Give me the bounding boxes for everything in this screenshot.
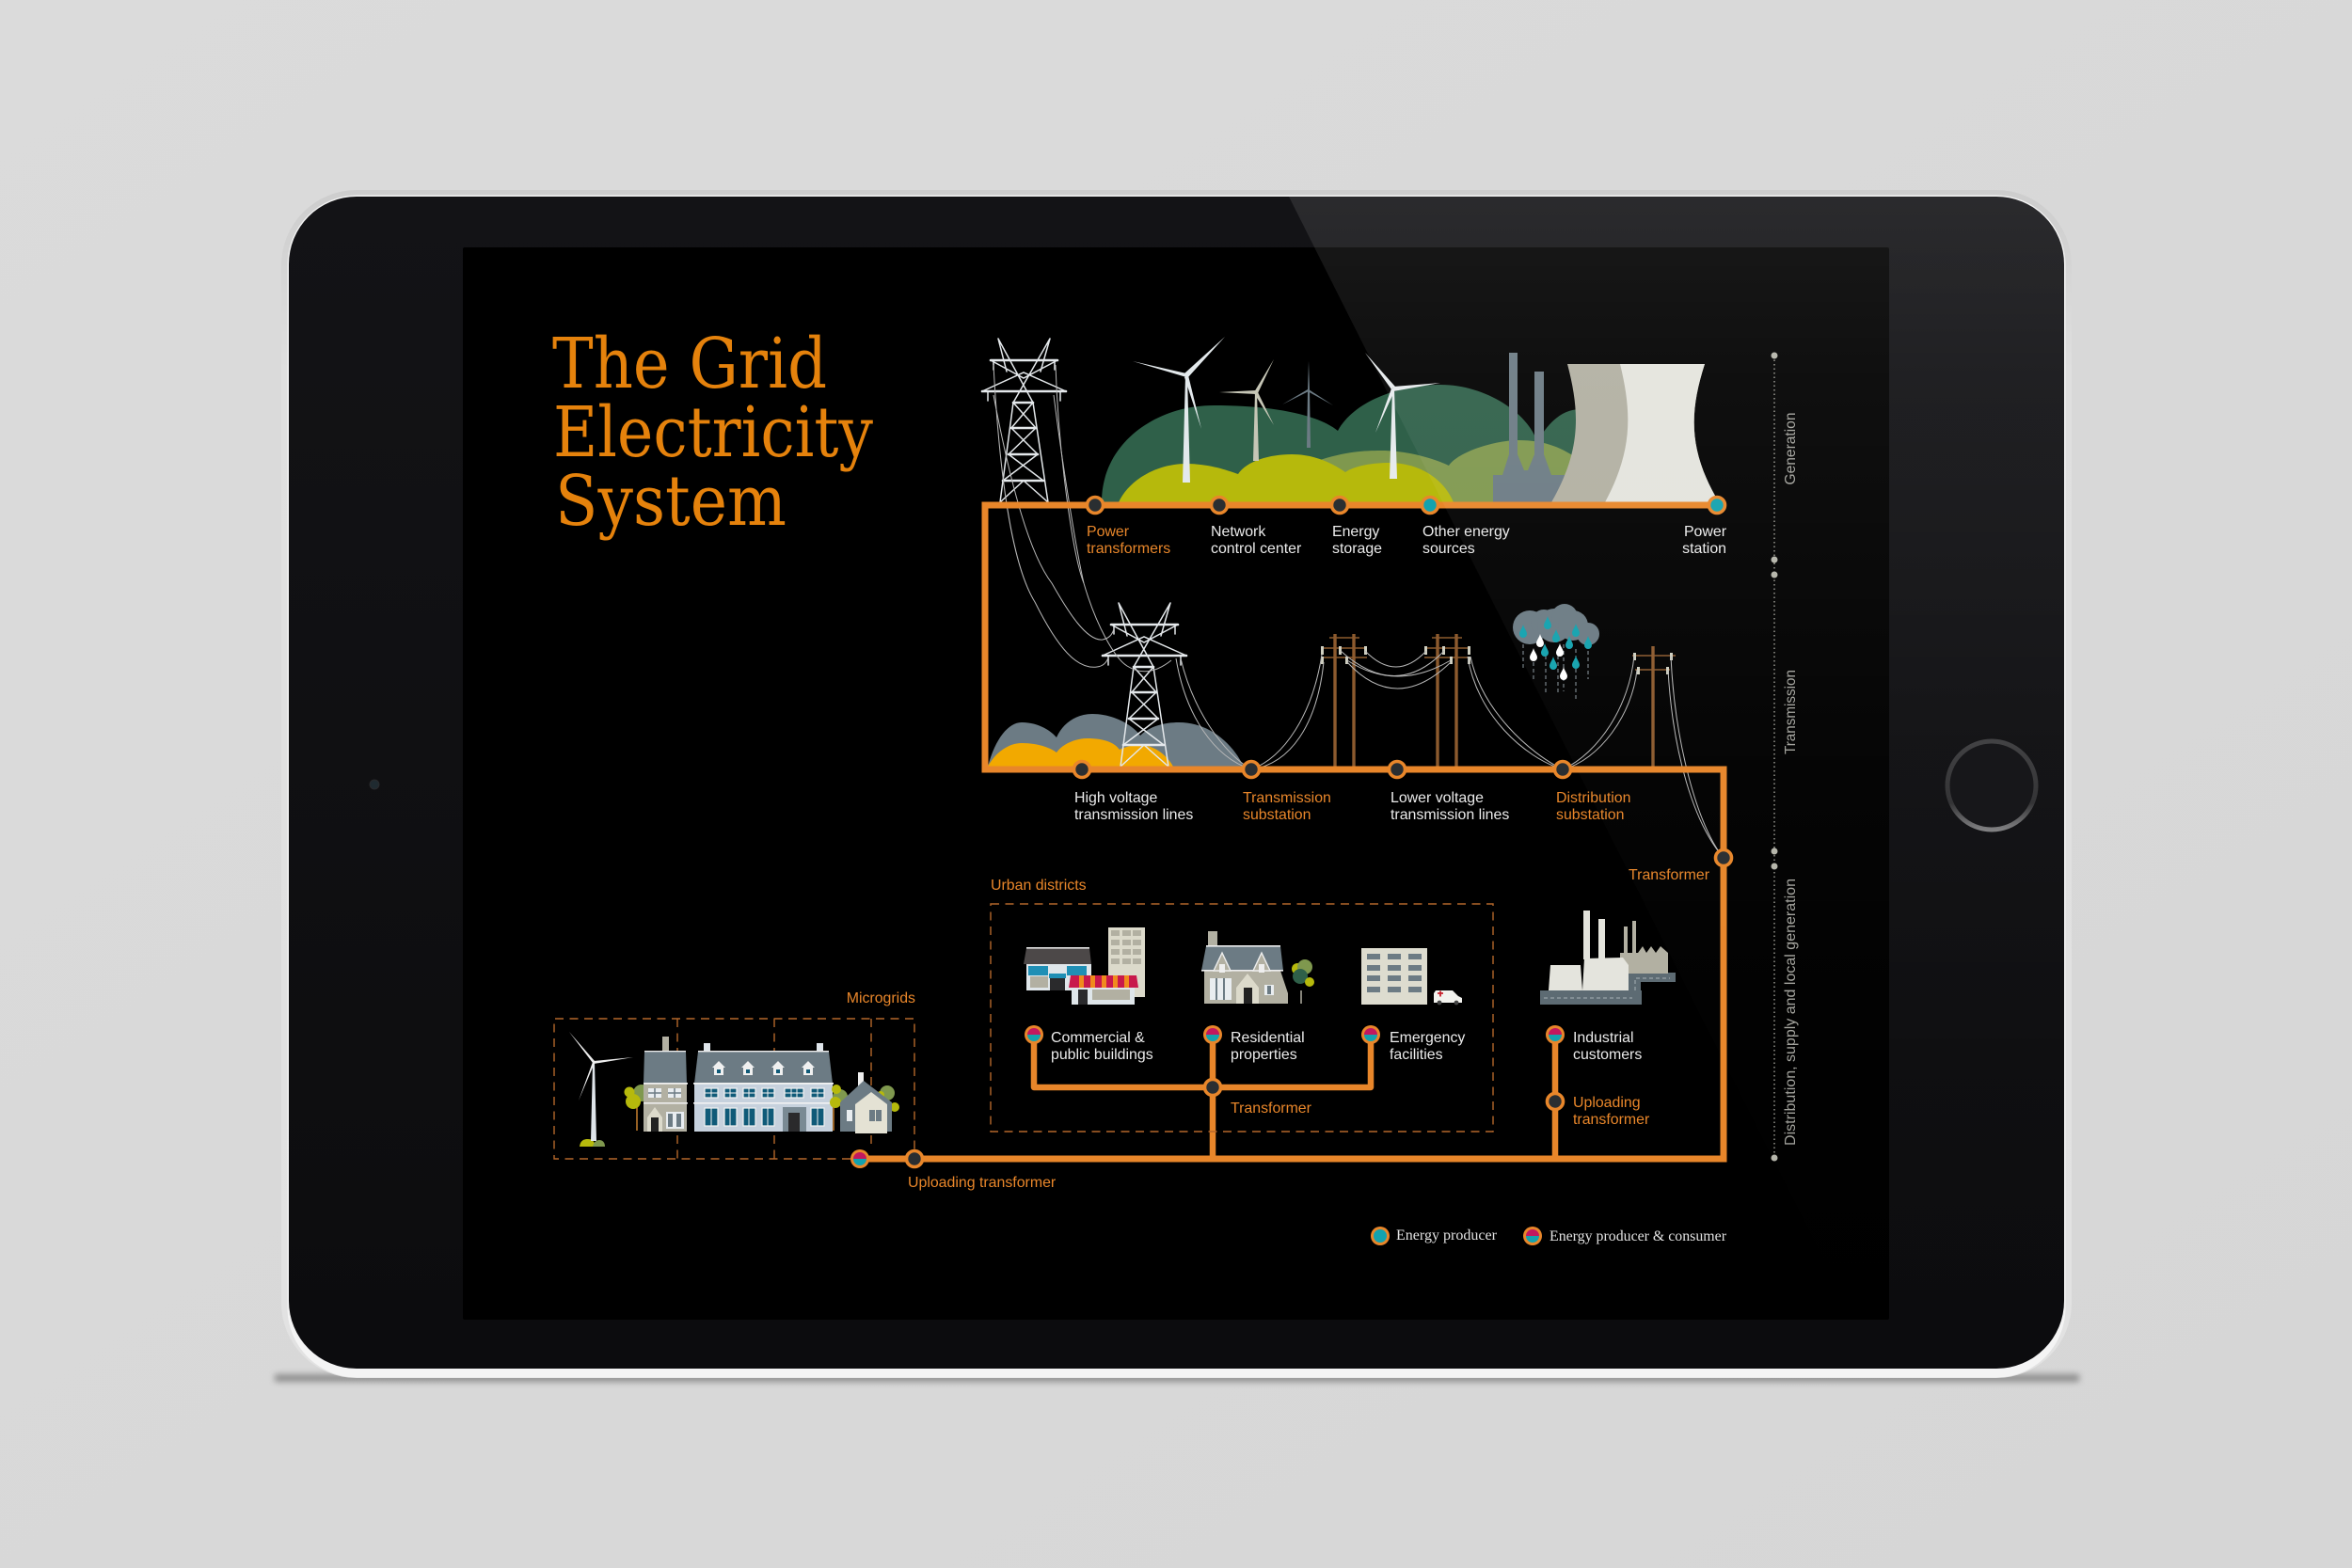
panel: industrial customers bbox=[1540, 911, 1676, 1128]
uploading transformer label: Uploading transformer bbox=[908, 1175, 1057, 1191]
wind turbine 4 bbox=[1365, 353, 1440, 479]
screen glare bbox=[1289, 197, 2064, 638]
urban labels: facilities bbox=[1390, 1047, 1443, 1063]
white drops bbox=[1530, 634, 1567, 680]
urban nodes bbox=[1025, 1025, 1380, 1095]
microgrid nodes bbox=[850, 1149, 922, 1168]
transmission labels bbox=[1074, 790, 1710, 883]
icon: commercial buildings bbox=[1024, 927, 1145, 1005]
transmission labels: transmission lines bbox=[1391, 807, 1509, 823]
panel: microgrids bbox=[554, 990, 1057, 1191]
icon: factory bbox=[1540, 911, 1676, 1005]
transmission labels: High voltage bbox=[1074, 790, 1157, 806]
axis label: distribution: Distribution, supply and local generation bbox=[1783, 879, 1799, 1146]
yellow hills bbox=[988, 738, 1173, 767]
transmission labels: Transmission bbox=[1243, 790, 1331, 806]
wind turbine 1 bbox=[1133, 337, 1225, 483]
title: The Grid bbox=[552, 324, 827, 404]
axis label: transmission: Transmission bbox=[1783, 670, 1799, 754]
axis label: generation: Generation bbox=[1783, 412, 1799, 485]
urban labels bbox=[1051, 1030, 1465, 1117]
side stage axis bbox=[1771, 352, 1799, 1161]
generation labels: control center bbox=[1211, 541, 1302, 557]
tablet shadow bbox=[275, 1374, 2079, 1382]
pylon 2 bbox=[1103, 603, 1186, 767]
title: System bbox=[555, 461, 787, 542]
transmission labels: transmission lines bbox=[1074, 807, 1193, 823]
cooling tower bbox=[1551, 364, 1719, 502]
industrial labels bbox=[1573, 1030, 1650, 1128]
generation labels: Energy bbox=[1332, 524, 1379, 540]
urban labels: Residential bbox=[1231, 1030, 1305, 1046]
axis dots bbox=[1771, 352, 1778, 1161]
icon: terrace house bbox=[644, 1037, 688, 1132]
icon: emergency facility bbox=[1361, 948, 1462, 1005]
industrial labels: Uploading bbox=[1573, 1095, 1641, 1111]
generation labels: transformers bbox=[1087, 541, 1170, 557]
generation labels: Power bbox=[1684, 524, 1726, 540]
generation labels: Other energy bbox=[1422, 524, 1510, 540]
urban labels: Emergency bbox=[1390, 1030, 1465, 1046]
transmission labels: Distribution bbox=[1556, 790, 1630, 806]
tablet camera bbox=[370, 780, 379, 789]
icon: residential house bbox=[1201, 931, 1314, 1004]
transmission labels: substation bbox=[1243, 807, 1311, 823]
urban labels: public buildings bbox=[1051, 1047, 1153, 1063]
generation labels bbox=[1087, 524, 1727, 557]
rain cloud bbox=[1513, 604, 1599, 701]
power station chimneys bbox=[1493, 353, 1566, 502]
legend bbox=[1371, 1227, 1727, 1245]
urban labels: Commercial & bbox=[1051, 1030, 1145, 1046]
transmission labels: Transformer bbox=[1629, 867, 1710, 883]
microgrids label: Microgrids bbox=[847, 990, 915, 1006]
icon: large house bbox=[693, 1043, 834, 1132]
teal drops bbox=[1519, 616, 1592, 670]
legend: energy producer and consumer: Energy producer & consumer bbox=[1549, 1228, 1727, 1244]
tablet silver frame bbox=[281, 190, 2072, 1378]
title bbox=[552, 324, 873, 542]
home button bbox=[1947, 741, 2036, 830]
wind turbine 3 bbox=[1282, 361, 1333, 448]
microgrid dashed boxes bbox=[554, 1019, 914, 1159]
industrial nodes bbox=[1546, 1025, 1565, 1110]
olive hills bbox=[1317, 440, 1581, 502]
cables bbox=[993, 365, 1724, 858]
legend: energy producer bbox=[1371, 1227, 1498, 1245]
cloud shape bbox=[1513, 604, 1599, 645]
generation labels: station bbox=[1682, 541, 1726, 557]
icon: cottage bbox=[840, 1072, 892, 1133]
generation scene illustration bbox=[982, 337, 1719, 502]
urban districts label: Urban districts bbox=[991, 878, 1087, 894]
panel: urban districts bbox=[991, 878, 1493, 1132]
rain dashes bbox=[1523, 644, 1588, 701]
transmission nodes bbox=[1074, 762, 1731, 865]
industrial labels: customers bbox=[1573, 1047, 1642, 1063]
icon: left tree bbox=[625, 1085, 650, 1131]
title: Electricity bbox=[553, 392, 873, 473]
generation labels: storage bbox=[1332, 541, 1382, 557]
orange grid line bbox=[860, 505, 1724, 1159]
insulators bbox=[1321, 646, 1673, 674]
urban labels: Transformer bbox=[1231, 1101, 1312, 1117]
transmission scene illustration bbox=[988, 365, 1724, 858]
legend: energy producer: Energy producer bbox=[1396, 1227, 1498, 1243]
wooden poles bbox=[1322, 634, 1676, 767]
dark green hills bbox=[1102, 385, 1581, 502]
wind turbine 2 bbox=[1219, 359, 1274, 461]
industrial labels: transformer bbox=[1573, 1112, 1650, 1128]
generation labels: sources bbox=[1422, 541, 1475, 557]
urban feeder lines bbox=[1034, 1035, 1555, 1159]
generation labels: Power bbox=[1087, 524, 1129, 540]
transmission labels: substation bbox=[1556, 807, 1624, 823]
urban dashed box bbox=[991, 904, 1493, 1132]
tablet screen bbox=[463, 247, 1889, 1320]
industrial labels: Industrial bbox=[1573, 1030, 1633, 1046]
lime hills bbox=[1119, 454, 1454, 502]
tablet device bbox=[275, 190, 2079, 1382]
grey hills bbox=[988, 714, 1244, 767]
icon: tree behind cottage bbox=[877, 1085, 899, 1112]
pylon 1 bbox=[982, 339, 1066, 502]
generation labels: Network bbox=[1211, 524, 1265, 540]
urban labels: properties bbox=[1231, 1047, 1297, 1063]
dotted line bbox=[1773, 356, 1775, 1158]
icon: microgrid turbine bbox=[569, 1032, 633, 1147]
generation nodes bbox=[1088, 497, 1725, 514]
transmission labels: Lower voltage bbox=[1391, 790, 1484, 806]
icon: right tree bbox=[830, 1085, 848, 1131]
